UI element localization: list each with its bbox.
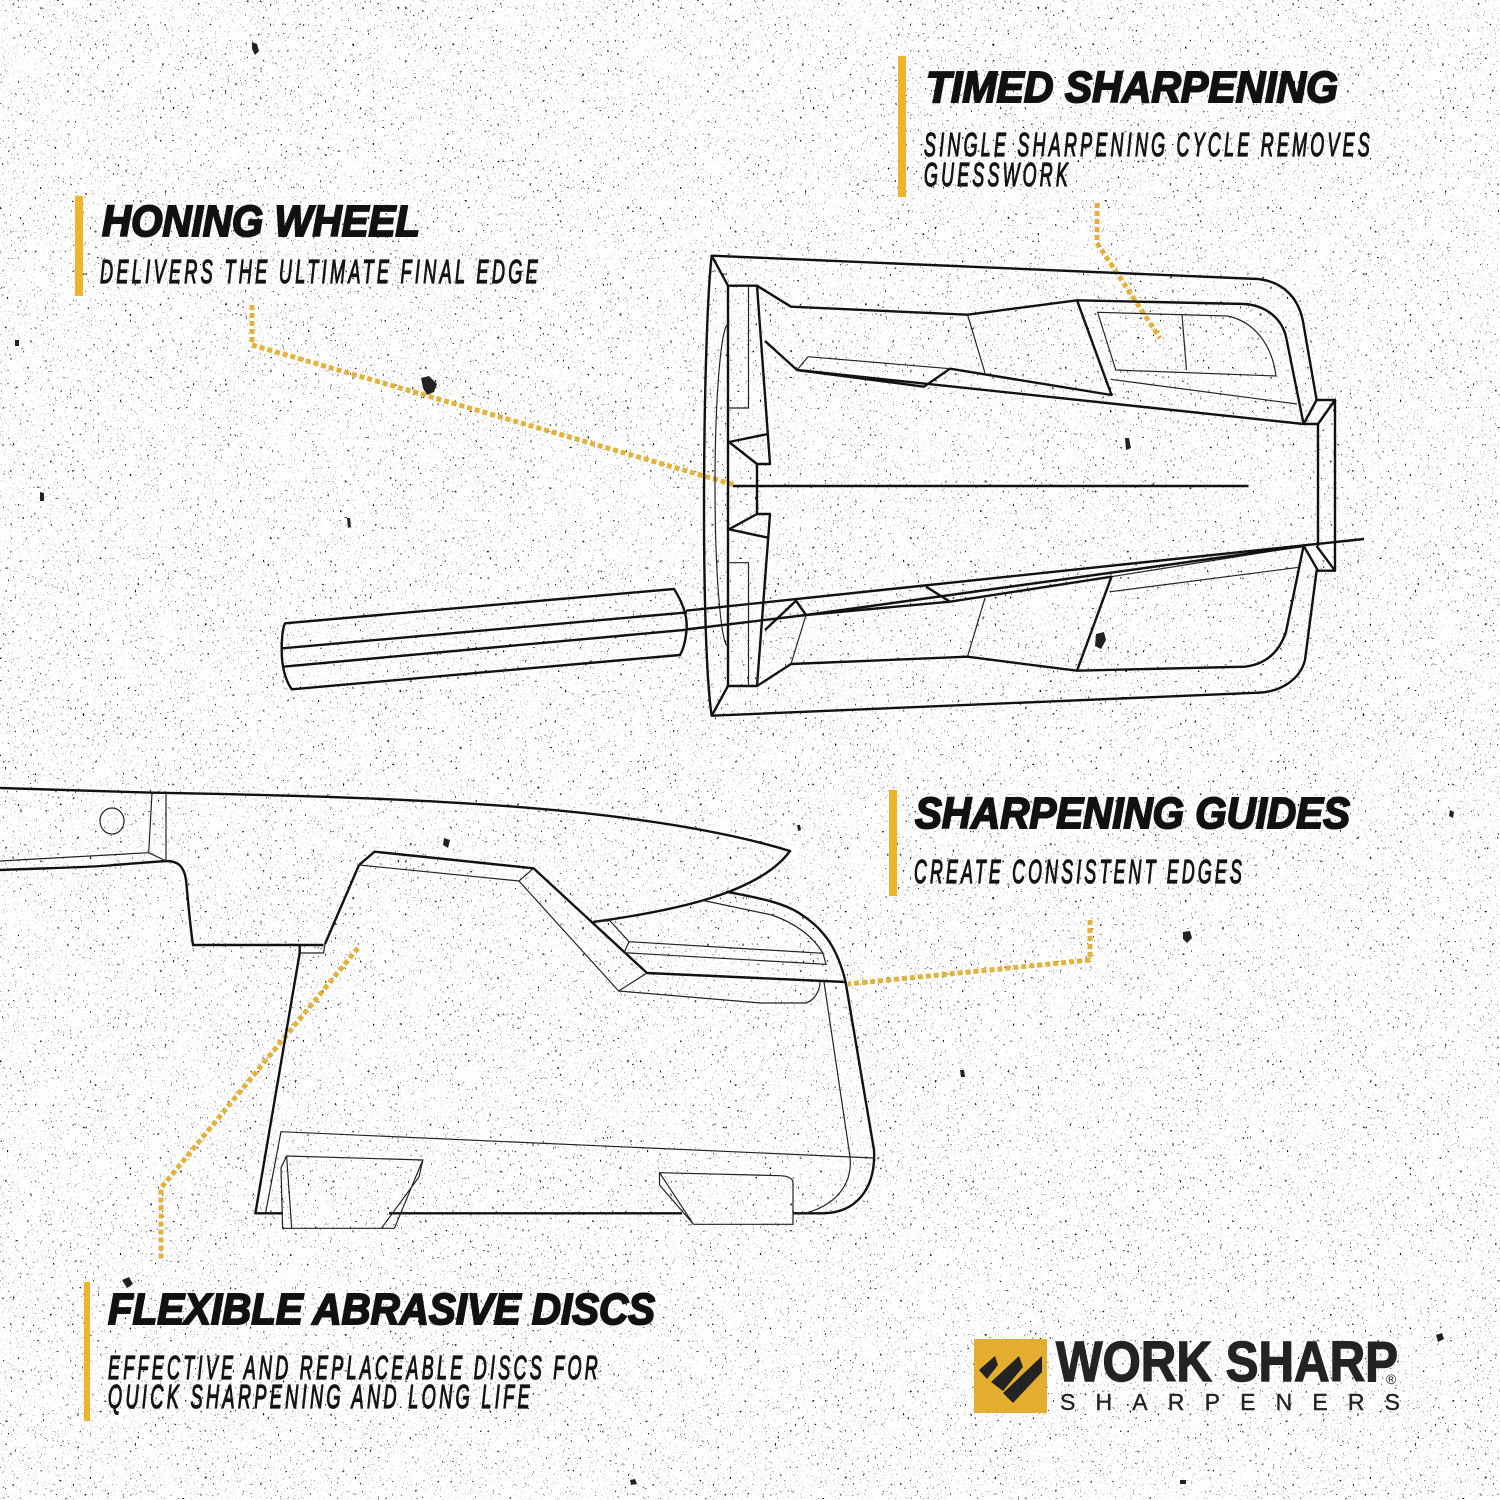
leader: honing wheel <box>252 305 735 485</box>
callout: timed sharpening <box>898 56 1373 197</box>
callout: flexible abrasive discs: QUICK SHARPENING AND LONG LIFE <box>108 1378 533 1415</box>
callout: sharpening guides: SHARPENING GUIDES <box>915 789 1350 838</box>
lower guide fine lines <box>791 546 1304 664</box>
lower guide <box>757 546 1304 686</box>
center wheel line <box>733 485 1248 487</box>
leader: flexible abrasive discs <box>161 948 358 1260</box>
side-view knife <box>0 788 790 945</box>
callout: sharpening guides <box>889 789 1350 896</box>
side-view sharpener <box>255 852 874 1228</box>
leader: sharpening guides <box>848 920 1090 984</box>
leader: timed sharpening <box>1097 203 1160 338</box>
leader lines <box>161 203 1160 1260</box>
upper guide fine lines <box>797 312 1297 404</box>
logo registered mark: ® <box>1386 1371 1397 1387</box>
logo: Work Sharp Sharpeners <box>974 1330 1400 1415</box>
logo wordmark: WORK SHARP <box>1056 1330 1398 1394</box>
right foot <box>660 1173 793 1224</box>
left foot <box>281 1156 423 1228</box>
callout: honing wheel: DELIVERS THE ULTIMATE FINAL EDGE <box>100 253 541 290</box>
inner left rectangles and wheel ellipse <box>715 286 748 686</box>
notches and wheel <box>729 434 768 538</box>
callout: flexible abrasive discs: FLEXIBLE ABRASIVE DISCS <box>108 1285 655 1334</box>
knife blade <box>0 788 790 945</box>
icon: knife handle rod <box>282 589 687 689</box>
sharpener outer shell <box>704 256 1335 716</box>
body fine lines <box>300 865 850 1213</box>
top-view sharpener outline <box>686 256 1364 716</box>
knife handle detail <box>0 793 166 861</box>
end block <box>1304 400 1335 571</box>
upper guide <box>757 286 1304 424</box>
callout: timed sharpening: GUESSWORK <box>924 156 1071 193</box>
base line <box>266 1132 874 1213</box>
logo mark <box>974 1339 1047 1413</box>
knife pin <box>100 808 124 834</box>
inner left face <box>712 256 770 716</box>
logo subtitle: SHARPENERS <box>1060 1389 1400 1415</box>
body outline <box>255 852 874 1213</box>
callout: flexible abrasive discs: EFFECTIVE AND REPLACEABLE DISCS FOR <box>108 1349 601 1386</box>
callout: honing wheel <box>75 196 541 296</box>
knife edge lines <box>686 539 1364 630</box>
callout: timed sharpening: TIMED SHARPENING <box>926 63 1338 112</box>
callout: honing wheel: HONING WHEEL <box>102 197 420 246</box>
callout: flexible abrasive discs <box>84 1282 655 1421</box>
